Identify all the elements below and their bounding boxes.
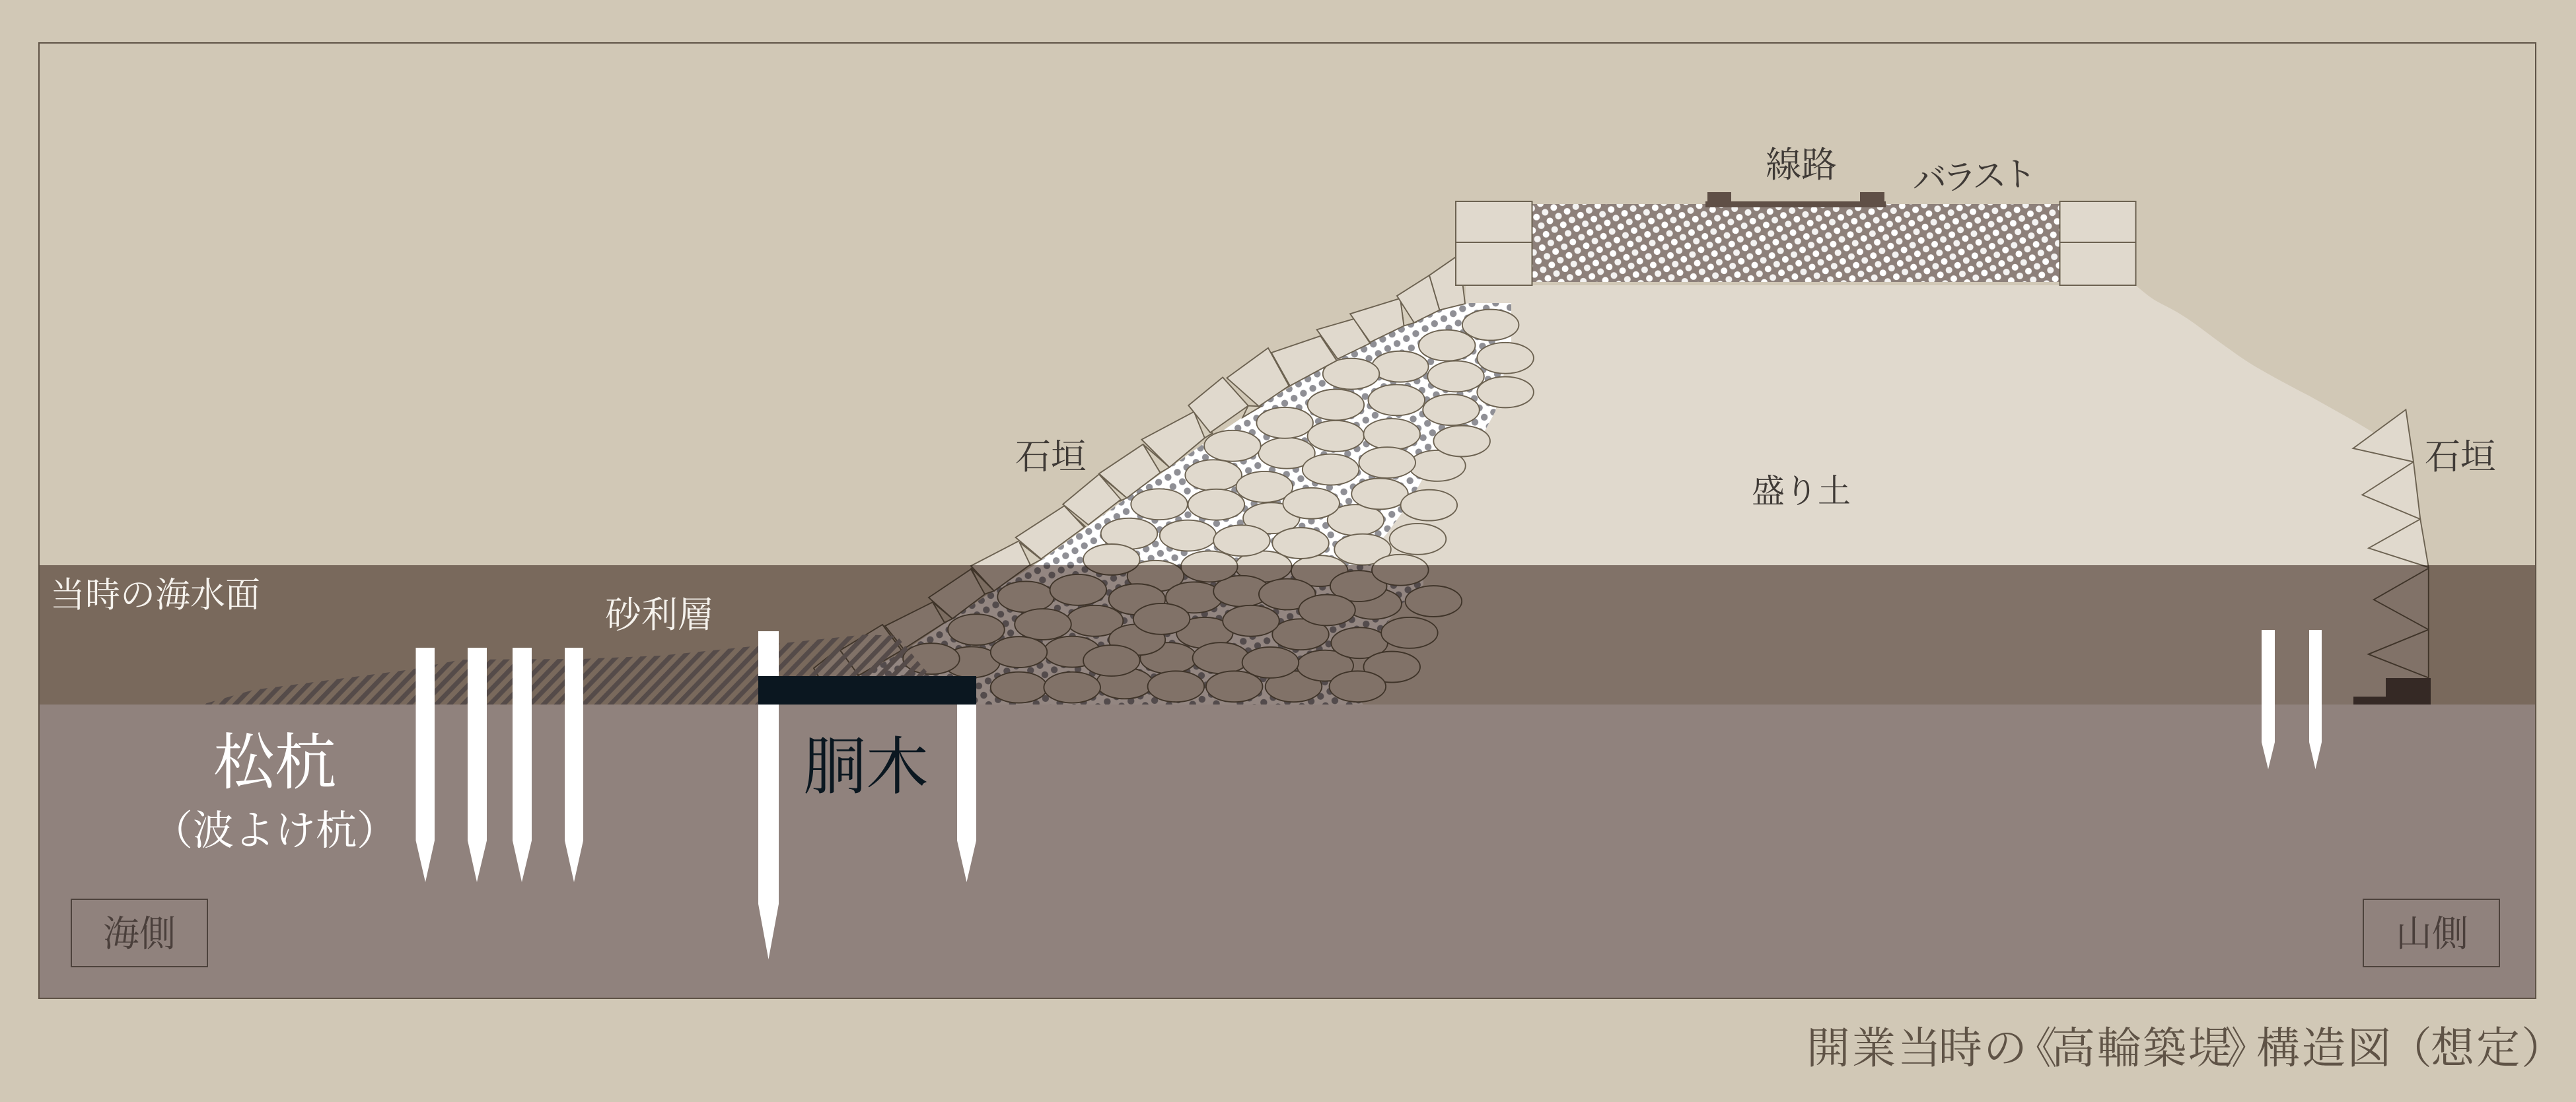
seabed ground xyxy=(39,705,2536,998)
label: 盛り土: 盛り土 xyxy=(1752,473,1851,510)
ballast base xyxy=(1532,204,2060,282)
piles supporting 胴木 xyxy=(758,631,976,959)
label: 線路: 線路 xyxy=(1766,145,1837,185)
sea water band: 当時の海水面 xyxy=(39,565,2536,705)
piles: 松杭 wave-break piles xyxy=(416,648,583,882)
label: 石垣 left: 石垣 xyxy=(1015,437,1087,477)
sloped stone wall: 石垣 (sea side) xyxy=(814,257,1465,683)
mountain side tag: 山側: 山側 xyxy=(2396,914,2468,954)
ballast: バラスト xyxy=(1532,204,2060,282)
label: 当時の海水面: 当時の海水面 xyxy=(50,576,260,615)
embankment fill: 盛り土 xyxy=(1057,285,2429,705)
label: 砂利層: 砂利層 xyxy=(605,595,714,635)
rubble core with dotted gravel xyxy=(858,303,1511,705)
track: 線路 rail xyxy=(1705,192,1886,207)
rubble white base xyxy=(858,303,1511,705)
lower wall stones xyxy=(814,540,1030,683)
sloped stone wall: 石垣 (mountain side triangles) xyxy=(2353,409,2429,678)
ballast dots xyxy=(1532,204,2060,282)
upper wall stones xyxy=(1016,257,1465,565)
rubble gravel dots xyxy=(858,303,1511,705)
sea side tag: 海側: 海側 xyxy=(103,914,176,954)
label: 石垣 right: 石垣 xyxy=(2425,437,2496,477)
stone wall footing xyxy=(2353,678,2431,705)
piles mountain side xyxy=(2262,630,2322,769)
mountain side tag: 山側 xyxy=(2363,899,2499,967)
label: バラスト: バラスト xyxy=(1912,156,2034,199)
sea side tag: 海側 xyxy=(71,899,207,967)
gravel layer hatch: 砂利層 xyxy=(202,635,931,705)
crossbeam: 胴木 xyxy=(758,676,976,705)
rubble stones: ellipses xyxy=(903,310,1534,703)
label: 胴木: 胴木 xyxy=(803,732,929,802)
retaining blocks left xyxy=(1456,201,1532,285)
label: 波よけ杭: （波よけ杭） xyxy=(152,809,398,854)
title caption: 開業当時の《高輪築堤》構造図（想定） xyxy=(1807,1025,2565,1073)
retaining blocks right xyxy=(2059,201,2136,285)
label: 松杭: 松杭 xyxy=(213,730,336,798)
